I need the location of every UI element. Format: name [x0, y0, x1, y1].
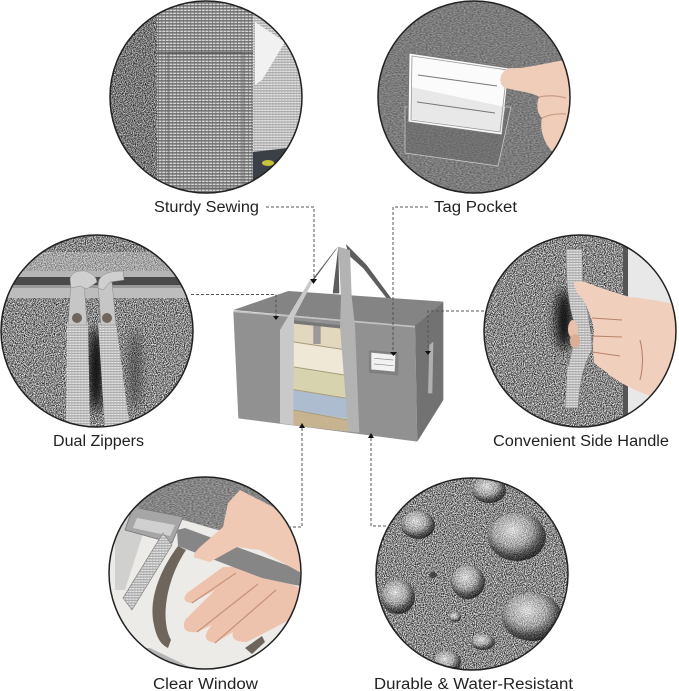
callout: tag pocket: Tag Pocket	[434, 199, 518, 216]
callout: sturdy sewing	[154, 199, 317, 284]
callout: convenient side handle: Convenient Side Handle	[493, 433, 669, 450]
panel: dual zippers detail circle	[0, 234, 194, 430]
front straps	[280, 247, 359, 433]
callout: durable and water-resistant	[368, 433, 574, 691]
hand below zipper: palm and fingers	[184, 566, 303, 643]
tag pocket on bag	[369, 350, 398, 376]
bag top face	[233, 291, 443, 327]
panel: side handle detail circle	[482, 233, 679, 429]
bag side face	[415, 302, 443, 442]
side handle on bag	[428, 342, 433, 393]
callout: clear window	[153, 423, 305, 691]
water droplets	[381, 477, 562, 673]
callout: convenient side handle	[425, 311, 669, 450]
central product: storage bag	[233, 244, 443, 442]
panel: tag pocket detail circle	[376, 0, 578, 196]
back handle	[311, 244, 391, 298]
fabric above zipper	[136, 478, 280, 530]
callout: dual zippers: Dual Zippers	[53, 433, 144, 450]
callout: dual zippers	[53, 294, 279, 450]
clear window with folded bedding	[291, 320, 355, 432]
callout: tag pocket	[390, 199, 518, 356]
panel: durable water-resistant detail circle	[374, 476, 570, 673]
panel: clear window detail circle	[105, 475, 305, 680]
bag front face	[233, 312, 417, 442]
callout: sturdy sewing: Sturdy Sewing	[154, 199, 259, 216]
panel: sturdy sewing detail circle	[109, 0, 303, 194]
